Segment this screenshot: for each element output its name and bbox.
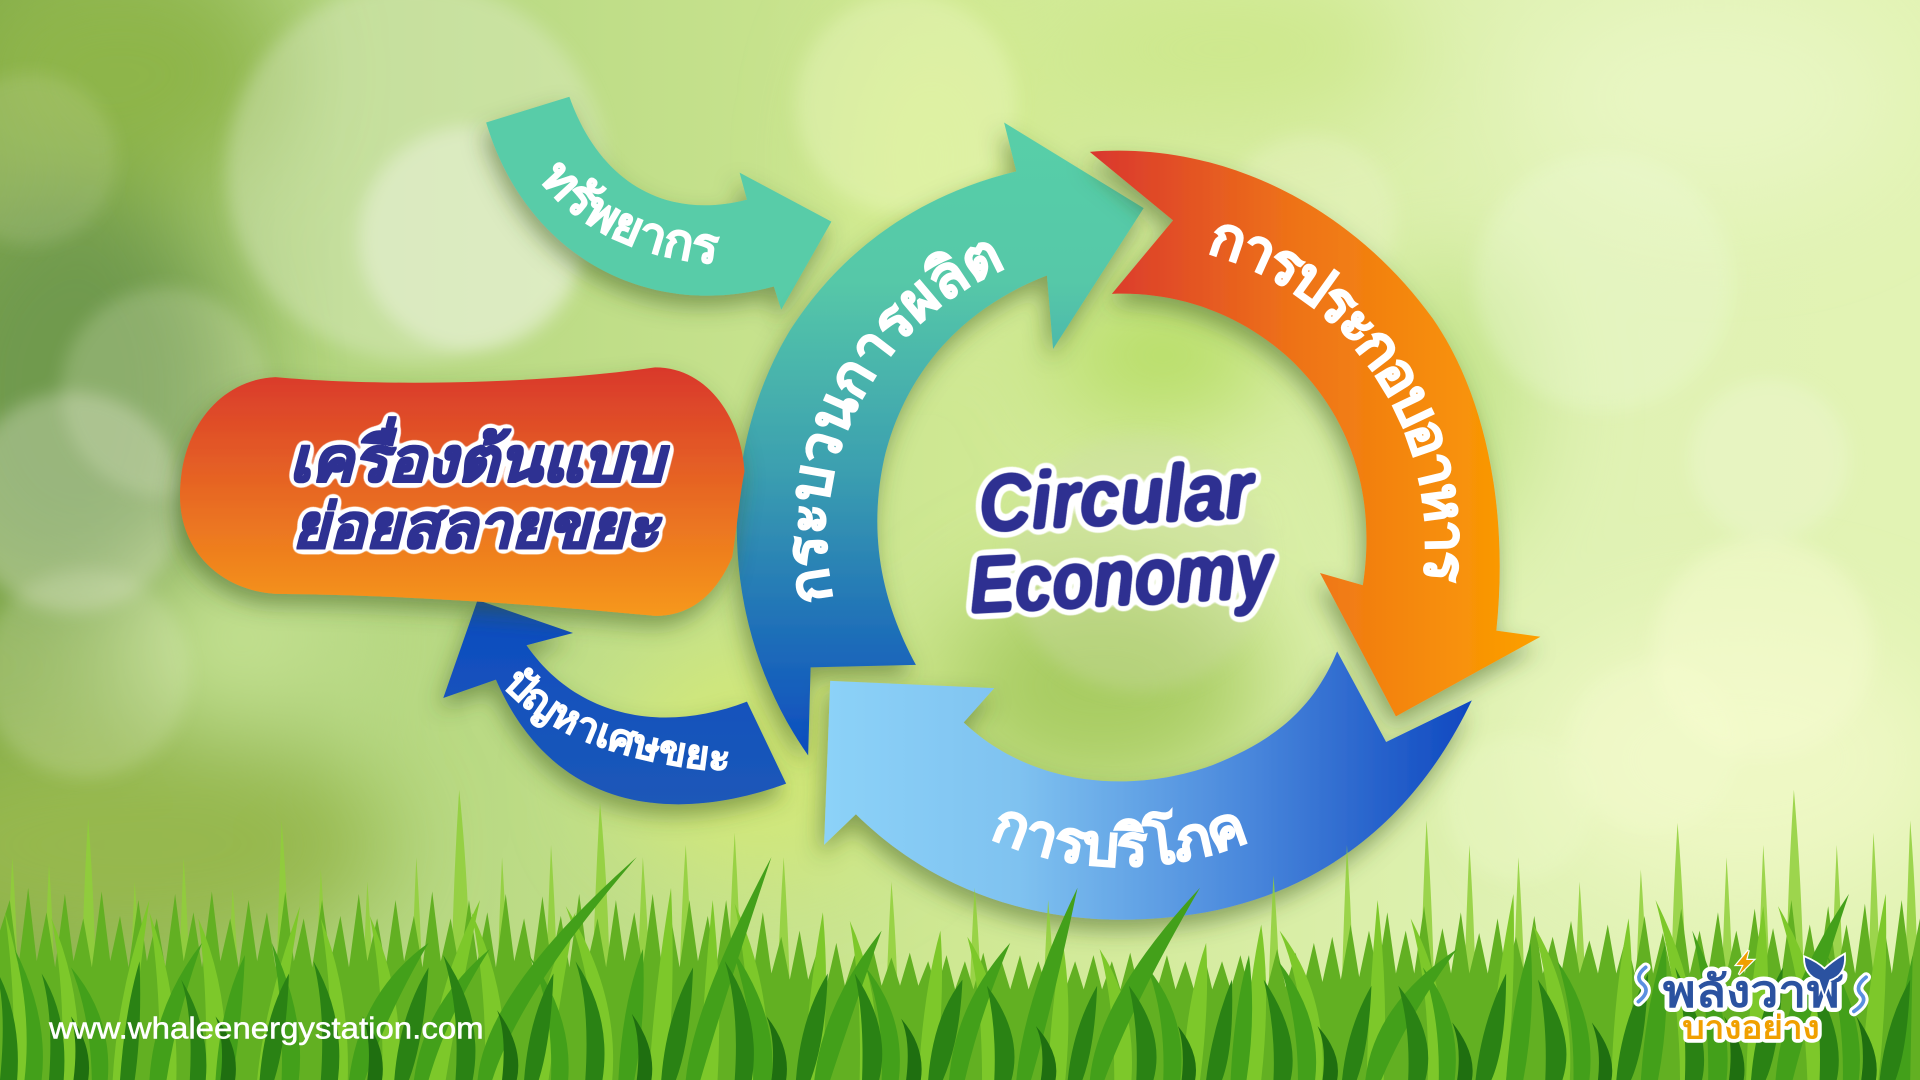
heading: prototype line 2: ย่อยสลายขยะ [293, 492, 662, 560]
icon: whale tail [1805, 955, 1844, 994]
icon: bolt [1736, 950, 1753, 975]
title: Circular Economy: Circular [976, 445, 1259, 549]
title: Circular Economy [963, 444, 1279, 631]
label: resources: ทรัพยากร [542, 162, 720, 264]
label: food process: การประกอบอาหาร [1209, 224, 1460, 584]
title: Circular Economy: Economy [967, 525, 1279, 631]
label: waste problem: ปัญหาเศษขยะ [505, 667, 728, 771]
arrow: resources [472, 96, 837, 324]
icon: left squiggle [1638, 967, 1646, 1002]
arrow: consumption [806, 652, 1475, 946]
arrow: waste problem [433, 602, 792, 830]
arrow: production process [723, 122, 1148, 770]
arrow: food process [1082, 146, 1540, 736]
website url: www.whaleenergystation.com [48, 1011, 484, 1045]
panel: biodegradable prototype [180, 367, 744, 616]
logo [1638, 950, 1866, 1045]
heading: prototype line 1: เครื่องต้นแบบ [289, 417, 670, 494]
grass [0, 790, 1920, 1080]
logo subtitle: บางอย่าง [1682, 1009, 1820, 1045]
logo name: พลังวาฬ [1663, 968, 1844, 1017]
label: consumption: การบริโภค [992, 807, 1248, 868]
icon: right squiggle [1854, 977, 1866, 1011]
label: production process: กระบวนการผลิต [792, 242, 1004, 602]
